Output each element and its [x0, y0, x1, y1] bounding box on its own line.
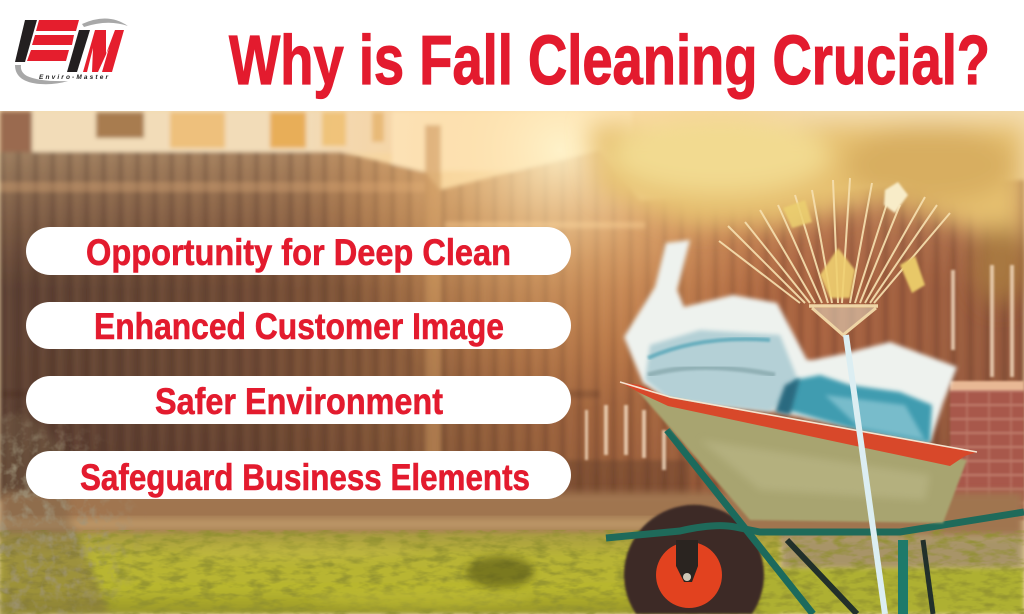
- logo: [15, 18, 128, 84]
- fence highlights right: [585, 265, 1014, 470]
- grass: [0, 530, 1024, 614]
- pill: safer environment: Safer Environment: [155, 381, 443, 422]
- pill: safeguard: Safeguard Business Elements: [80, 457, 530, 498]
- wheelbarrow frame: [606, 430, 1024, 614]
- wheelbarrow tray: [620, 382, 977, 523]
- garbage bags: [624, 240, 957, 443]
- wheel: [624, 505, 764, 614]
- foliage top right: [590, 117, 1024, 305]
- sun glare: [0, 111, 1024, 511]
- pill: opportunity: Opportunity for Deep Clean: [86, 232, 511, 273]
- pill: safer environment: [26, 376, 571, 424]
- brick wall: [950, 381, 1024, 520]
- rake handle: [846, 335, 885, 614]
- path strip: [0, 492, 1024, 540]
- logo wordmark: Enviro-Master: [39, 74, 108, 81]
- rake: [719, 178, 950, 335]
- pill: customer image: Enhanced Customer Image: [94, 306, 504, 347]
- weeds left: [0, 412, 140, 614]
- header band: [0, 0, 1024, 111]
- rake leaves: [783, 182, 925, 298]
